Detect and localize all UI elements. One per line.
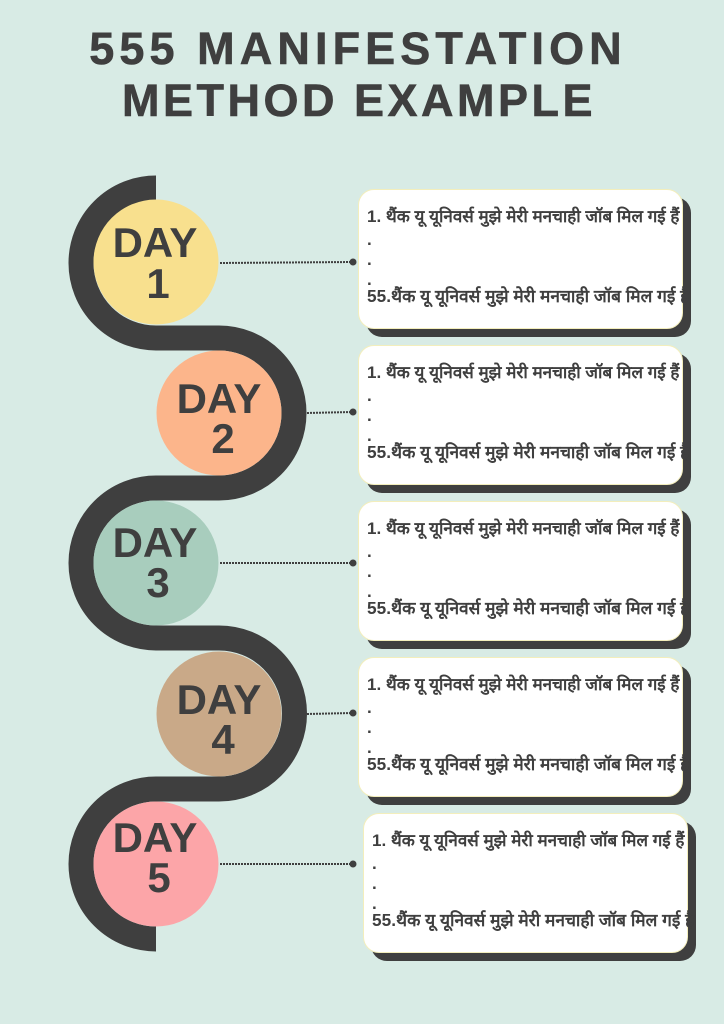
day 4 badge xyxy=(156,652,282,776)
connector: day 5 xyxy=(220,860,356,868)
day 3 badge: DAY xyxy=(113,519,197,566)
panel: day 5 affirmations: 1. थैंक यू यूनिवर्स मुझे मेरी मनचाही जॉब मिल गई हैं xyxy=(372,831,684,850)
panel: day 2 affirmations: . xyxy=(367,386,372,405)
day 1 badge: DAY xyxy=(113,219,197,266)
day 5 badge: DAY xyxy=(113,814,197,861)
day 4 badge: DAY xyxy=(177,676,261,723)
panel: day 4 affirmations: . xyxy=(367,738,372,757)
panel: day 3 affirmations: 55.थैंक यू यूनिवर्स मुझे मेरी मनचाही जॉब मिल गई है xyxy=(367,598,689,618)
day 5 badge: 5 xyxy=(147,854,171,901)
title xyxy=(89,23,627,126)
panel: day 3 affirmations: . xyxy=(367,582,372,601)
panel: day 4 affirmations xyxy=(358,657,691,805)
connector: day 1 xyxy=(220,258,356,266)
panel: day 2 affirmations xyxy=(358,345,691,493)
panel: day 1 affirmations: . xyxy=(367,230,372,249)
day 5 badge xyxy=(94,802,218,926)
connector: day 3 xyxy=(220,560,356,566)
title: 555 MANIFESTATION xyxy=(89,23,627,74)
panel: day 2 affirmations: 55.थैंक यू यूनिवर्स मुझे मेरी मनचाही जॉब मिल गई है xyxy=(367,442,689,462)
panel: day 1 affirmations: 55.थैंक यू यूनिवर्स मुझे मेरी मनचाही जॉब मिल गई है xyxy=(367,286,689,306)
panel: day 5 affirmations xyxy=(363,813,696,961)
panel: day 1 affirmations xyxy=(358,189,691,337)
serpentine path xyxy=(81,188,294,939)
panel: day 4 affirmations: . xyxy=(367,698,372,717)
panel: day 4 affirmations: . xyxy=(367,718,372,737)
panel: day 4 affirmations: 55.थैंक यू यूनिवर्स मुझे मेरी मनचाही जॉब मिल गई है xyxy=(367,754,689,774)
connector: day 4 xyxy=(307,710,356,716)
panel: day 5 affirmations: 55.थैंक यू यूनिवर्स मुझे मेरी मनचाही जॉब मिल गई है xyxy=(372,910,694,930)
panel: day 5 affirmations: . xyxy=(372,854,377,873)
day 2 badge: 2 xyxy=(211,415,235,462)
day 1 badge xyxy=(94,200,218,324)
day 4 badge: 4 xyxy=(211,716,235,763)
panel: day 3 affirmations: . xyxy=(367,562,372,581)
panel: day 5 affirmations: . xyxy=(372,894,377,913)
day 2 badge xyxy=(156,350,282,476)
panel: day 4 affirmations: 1. थैंक यू यूनिवर्स मुझे मेरी मनचाही जॉब मिल गई हैं xyxy=(367,675,679,694)
title: METHOD EXAMPLE xyxy=(122,75,596,126)
panel: day 1 affirmations: 1. थैंक यू यूनिवर्स मुझे मेरी मनचाही जॉब मिल गई हैं xyxy=(367,207,679,226)
panel: day 5 affirmations: . xyxy=(372,874,377,893)
panel: day 3 affirmations: 1. थैंक यू यूनिवर्स मुझे मेरी मनचाही जॉब मिल गई हैं xyxy=(367,519,679,538)
panel: day 2 affirmations: 1. थैंक यू यूनिवर्स मुझे मेरी मनचाही जॉब मिल गई हैं xyxy=(367,363,679,382)
day 3 badge xyxy=(94,500,218,626)
day 3 badge: 3 xyxy=(146,559,170,606)
connector: day 2 xyxy=(307,408,356,416)
day 1 badge: 1 xyxy=(146,260,170,307)
panel: day 3 affirmations: . xyxy=(367,542,372,561)
panel: day 2 affirmations: . xyxy=(367,426,372,445)
panel: day 2 affirmations: . xyxy=(367,406,372,425)
day 2 badge: DAY xyxy=(177,375,261,422)
panel: day 1 affirmations: . xyxy=(367,250,372,269)
panel: day 1 affirmations: . xyxy=(367,270,372,289)
panel: day 3 affirmations xyxy=(358,501,691,649)
